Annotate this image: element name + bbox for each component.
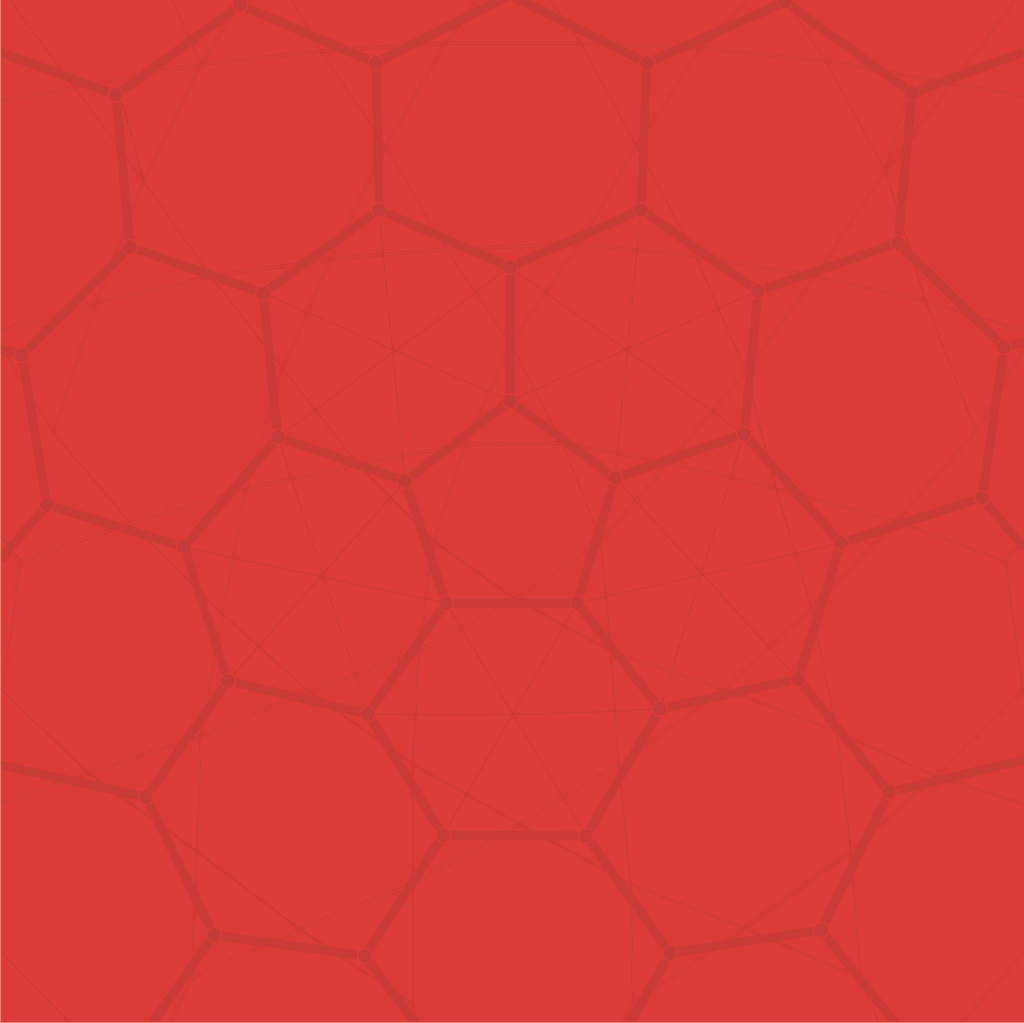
light left border	[0, 0, 1, 1023]
star: lower left hexagon	[184, 437, 446, 714]
star: upper right hexagon	[510, 210, 758, 478]
star: lower right hexagon	[577, 434, 841, 709]
star: upper left hexagon	[263, 210, 510, 481]
hub star lines inside the hexagonal faces	[184, 210, 841, 836]
light bottom border	[0, 1022, 1024, 1023]
star: bottom centre hexagon	[368, 603, 660, 836]
